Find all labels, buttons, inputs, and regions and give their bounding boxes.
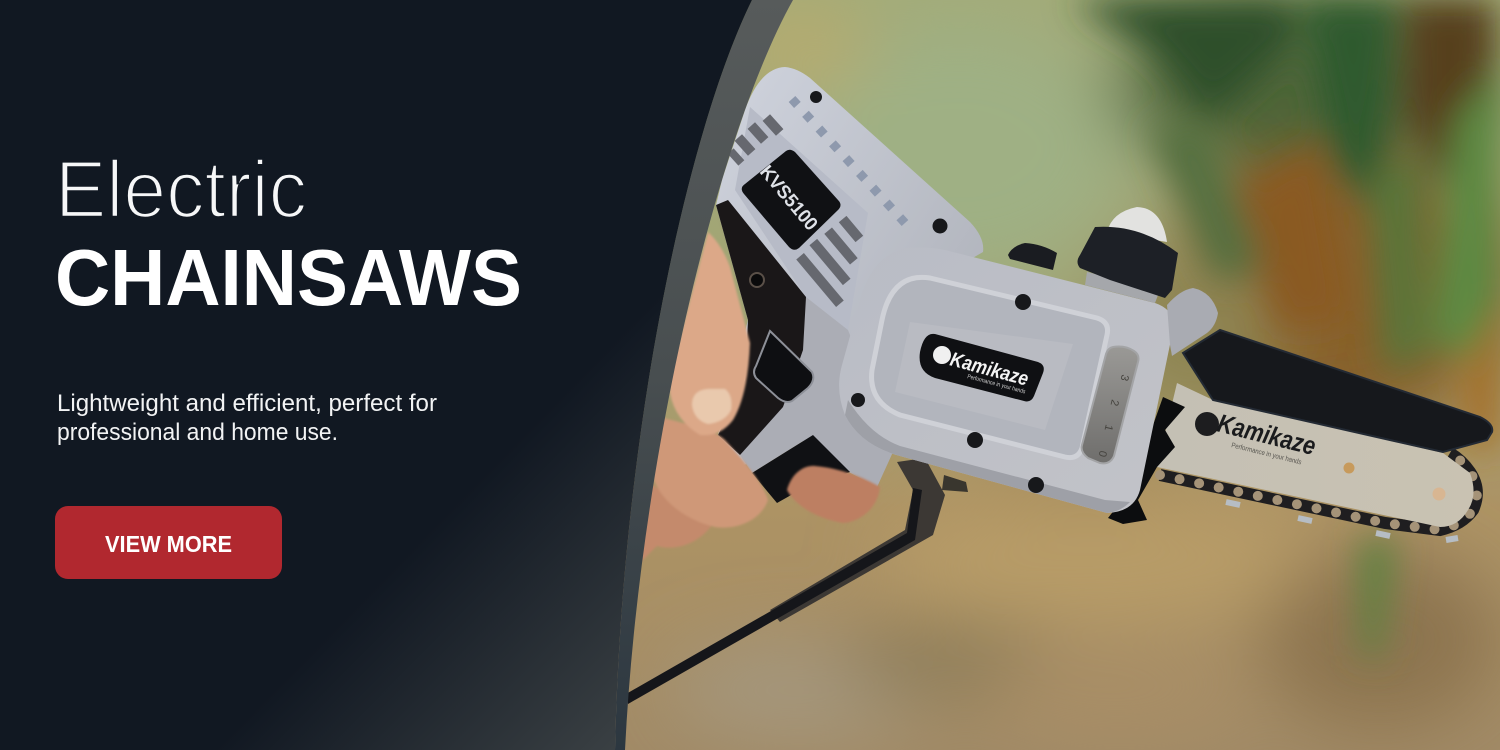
cover plate xyxy=(839,247,1173,513)
black grip lower pad xyxy=(752,435,850,503)
button: view more xyxy=(55,506,282,579)
middle finger on lower pad xyxy=(787,466,880,523)
inner facet xyxy=(735,107,868,330)
rivets xyxy=(1344,462,1446,500)
description: Lightweight and efficient, perfect for xyxy=(57,390,437,417)
title: CHAINSAWS xyxy=(55,233,522,322)
housing body xyxy=(716,67,983,487)
brand plate: Performance in your hands xyxy=(966,374,1026,395)
oil level window xyxy=(1082,346,1138,463)
steel bar xyxy=(1157,383,1474,527)
power button xyxy=(754,331,813,402)
thumbnail xyxy=(692,389,731,424)
brand plate recess xyxy=(895,322,1073,430)
thumb xyxy=(670,232,750,435)
oil level window: 0 xyxy=(1096,449,1109,458)
brand plate xyxy=(920,334,1044,401)
lower shadow edge xyxy=(845,400,1130,513)
hand xyxy=(640,232,880,562)
handle hoop xyxy=(626,458,945,704)
description xyxy=(57,390,437,446)
top ridge slots xyxy=(792,99,905,223)
oil level window: 2 xyxy=(1108,398,1121,407)
oil level window: 3 xyxy=(1118,373,1131,382)
left dark panel xyxy=(0,0,752,750)
black grip upper xyxy=(716,200,806,455)
black bar guard xyxy=(1183,330,1492,452)
oil cap xyxy=(1078,207,1178,303)
housing screws xyxy=(810,91,948,234)
chainsaw bar cover xyxy=(839,247,1173,513)
lower grip facet xyxy=(740,297,893,487)
bar release tab xyxy=(1167,288,1218,356)
model label: KVS5100 xyxy=(755,162,821,235)
ring and little fingers xyxy=(640,477,712,562)
cover screws xyxy=(851,294,1044,493)
grip socket xyxy=(750,273,764,287)
bar clamp xyxy=(1108,397,1185,524)
brand plate: Kamikaze xyxy=(948,349,1031,391)
model label xyxy=(742,150,840,250)
chainsaw motor housing xyxy=(716,67,983,503)
bar brand logo: Kamikaze xyxy=(1215,408,1319,461)
bar brand logo: Performance in your hands xyxy=(1231,442,1302,466)
title xyxy=(55,145,522,322)
button: view more: VIEW MORE xyxy=(105,531,232,557)
background photo: blurred foliage and ground xyxy=(600,0,1500,750)
cooling vents xyxy=(728,114,863,307)
curved grey band xyxy=(615,0,793,750)
control knob xyxy=(1008,243,1057,270)
description: professional and home use. xyxy=(57,419,338,446)
oil level window: 1 xyxy=(1102,423,1115,432)
oval ridge xyxy=(872,277,1108,458)
saw chain xyxy=(1160,453,1477,540)
title: Electric xyxy=(55,145,307,235)
index finger xyxy=(653,417,768,528)
chainsaw guide bar assembly xyxy=(1108,330,1492,540)
small bracket xyxy=(942,475,968,492)
